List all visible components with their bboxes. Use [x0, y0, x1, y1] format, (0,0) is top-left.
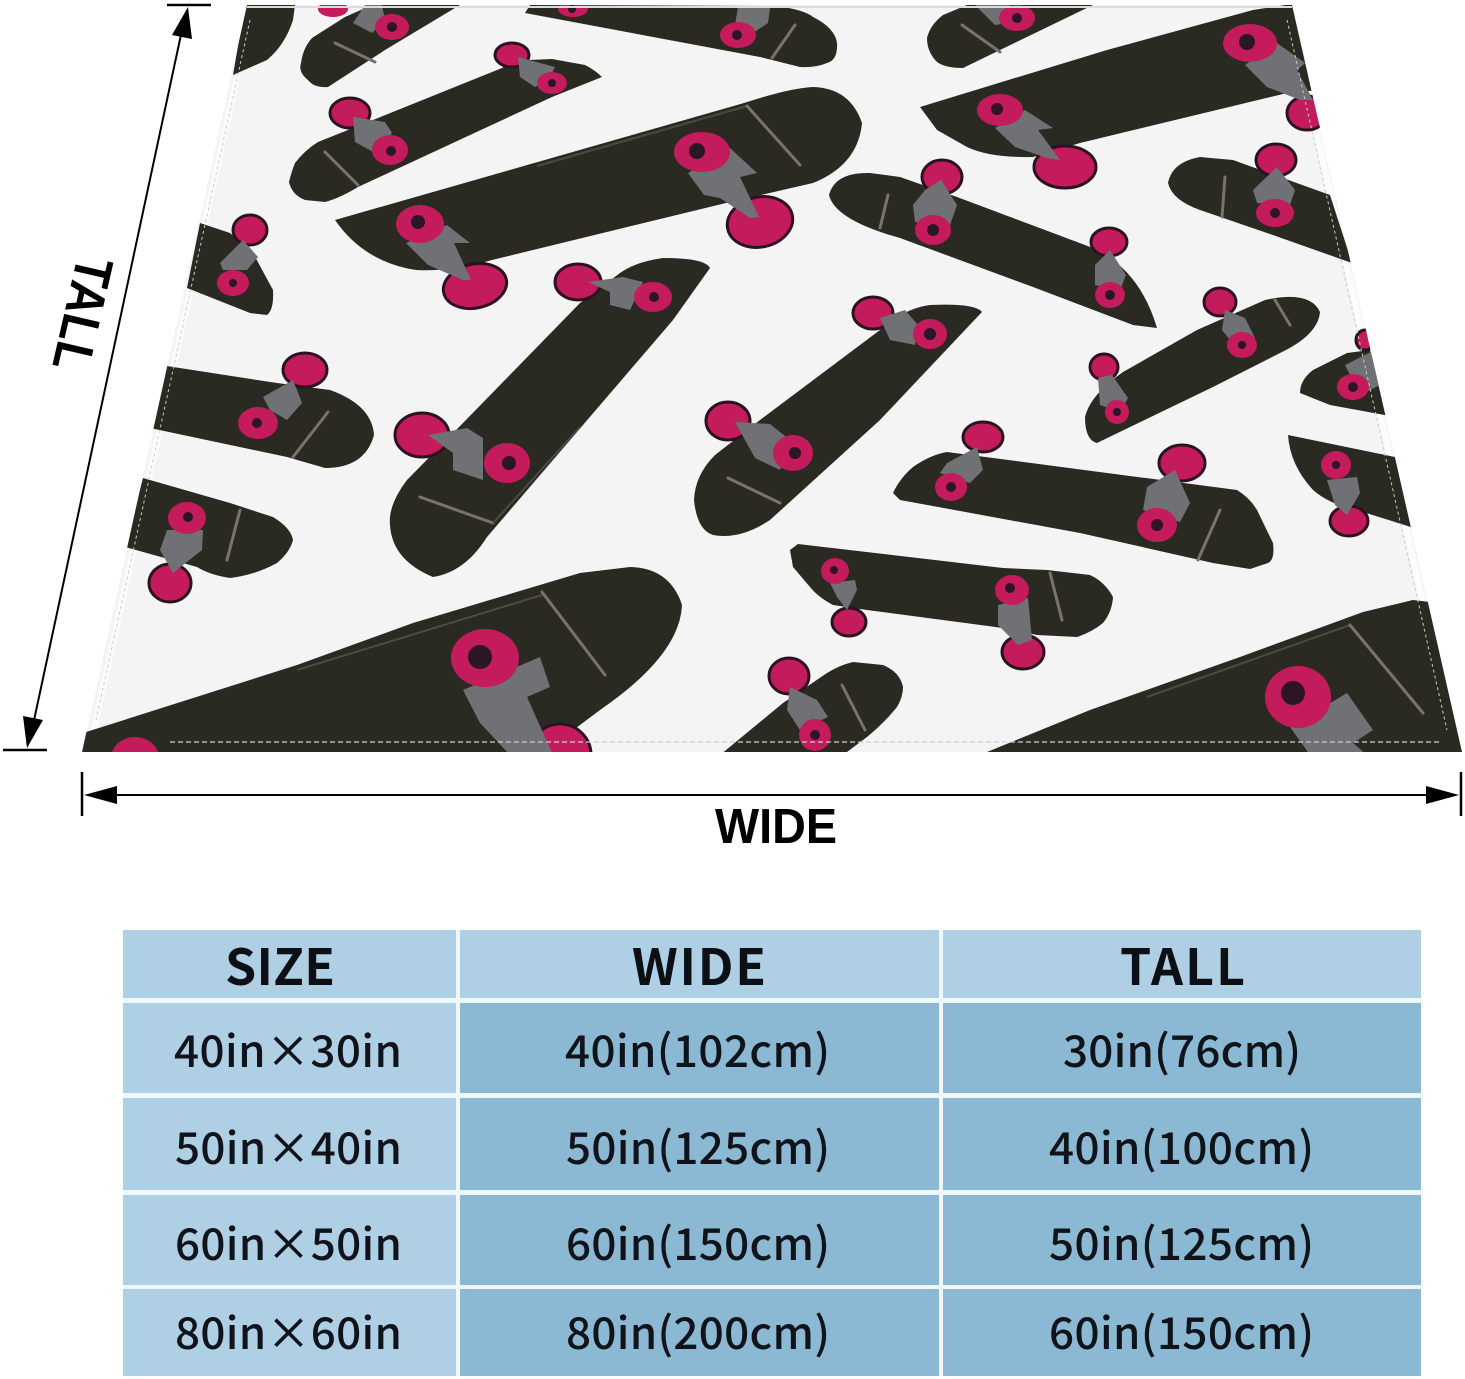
skateboard: centre right horizontal	[893, 422, 1273, 569]
table row: 50 by 40: 40in(100cm)	[1049, 1113, 1314, 1177]
skateboard: lower centre horizontal	[790, 544, 1113, 669]
skateboard: left edge small	[187, 215, 273, 315]
skateboard: upper left	[289, 43, 602, 202]
size table	[123, 928, 1421, 1376]
skateboard: top centre	[525, 1, 837, 67]
table row: 60 by 50: 60in(150cm)	[566, 1209, 830, 1273]
arrow: wide dimension	[82, 772, 1461, 816]
skateboard: top left	[300, 1, 460, 87]
table row: 50 by 40: 50in(125cm)	[566, 1113, 830, 1177]
table row: 40 by 30	[123, 1003, 1421, 1093]
table row: 40 by 30: 40in×30in	[174, 1016, 402, 1080]
skateboard: right middle	[829, 160, 1157, 328]
skateboard: large bottom left	[82, 567, 682, 752]
table row: 50 by 40: 50in×40in	[175, 1113, 402, 1177]
skateboard: centre diagonal	[694, 297, 982, 536]
skateboard: large top right	[920, 4, 1327, 188]
blanket with skateboard pattern	[82, 1, 1465, 786]
skateboard: top-left corner	[233, 5, 295, 75]
table row: 80 by 60: 80in×60in	[175, 1298, 402, 1362]
table row: 50 by 40	[123, 1098, 1421, 1190]
table row: 60 by 50	[123, 1195, 1421, 1285]
skateboard: large centre	[335, 87, 862, 314]
label: wide: WIDE	[715, 800, 837, 854]
arrow: tall dimension	[3, 5, 211, 750]
skateboard: top right small	[927, 5, 1093, 68]
table header row: SIZE	[225, 928, 335, 1000]
skateboard: right edge lower	[1288, 435, 1420, 536]
table header row: TALL	[1120, 928, 1245, 1000]
table row: 40 by 30: 40in(102cm)	[565, 1016, 830, 1080]
table header row: WIDE	[632, 928, 766, 1000]
label: tall: TALL	[40, 251, 124, 377]
skateboard: bottom centre	[720, 658, 903, 755]
skateboard: large bottom right	[987, 600, 1465, 755]
table row: 60 by 50: 60in×50in	[175, 1209, 402, 1273]
table row: 80 by 60: 80in(200cm)	[566, 1298, 830, 1362]
table row: 80 by 60	[123, 1289, 1421, 1376]
skateboard: left middle	[150, 353, 374, 468]
skateboard: left lower	[125, 478, 293, 602]
table row: 60 by 50: 50in(125cm)	[1049, 1209, 1314, 1273]
table row: 80 by 60: 60in(150cm)	[1049, 1298, 1314, 1362]
table header row	[123, 928, 1421, 1000]
skateboard: far right centre	[1085, 288, 1320, 443]
table row: 40 by 30: 30in(76cm)	[1063, 1016, 1301, 1080]
skateboard: far right upper	[1168, 144, 1352, 263]
skateboard: large left diagonal	[390, 258, 710, 577]
skateboard: right edge small	[1300, 330, 1390, 416]
